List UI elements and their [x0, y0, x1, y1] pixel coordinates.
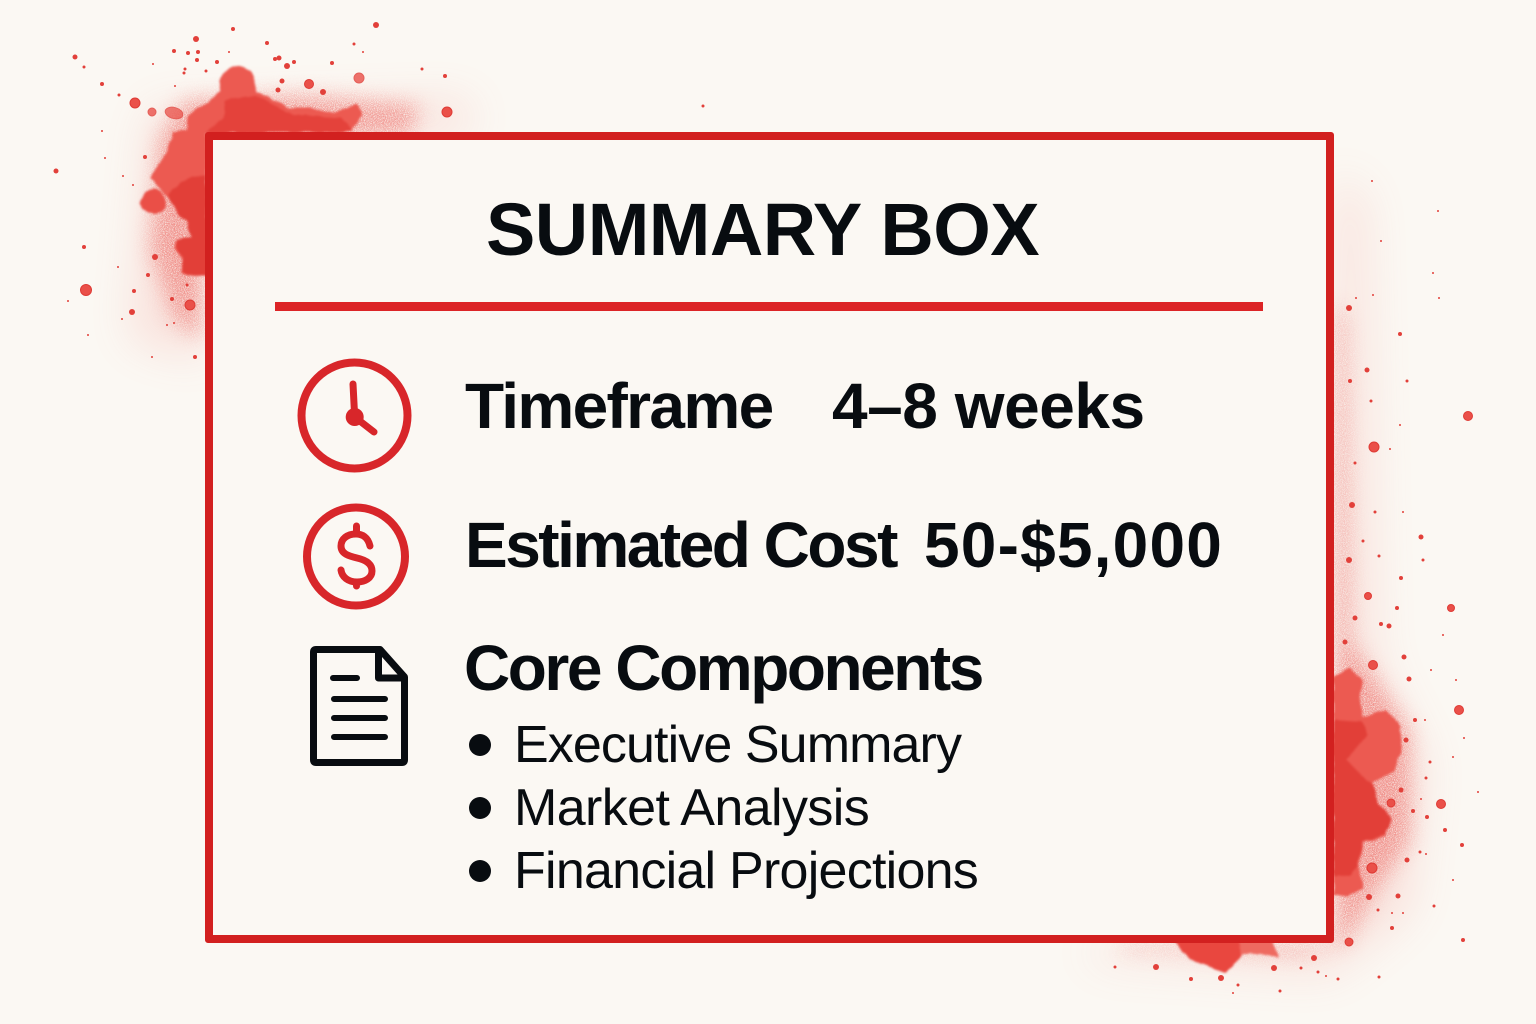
core components heading: Core Components	[464, 632, 982, 704]
summary box panel	[205, 132, 1334, 943]
paint blob: bottom	[1175, 940, 1278, 973]
title: SUMMARY BOX	[486, 188, 1039, 271]
icon: dollar	[303, 504, 409, 610]
soft pink halo around the frame	[130, 100, 1425, 975]
estimated cost value: 50-$5,000	[924, 509, 1223, 581]
paint blob: bottom right	[1333, 668, 1402, 897]
bullet dot 3	[469, 860, 491, 882]
bullet dot 2	[469, 797, 491, 819]
icon: clock	[298, 358, 412, 472]
bullet item: executive summary: Executive Summary	[514, 716, 961, 774]
bullet dot 1	[469, 734, 491, 756]
title divider	[275, 302, 1263, 311]
paint blob: top left	[140, 65, 363, 277]
estimated cost label: Estimated Cost	[465, 509, 896, 581]
large paint droplets	[80, 73, 1472, 946]
sprayed paint speckle	[150, 95, 1410, 955]
timeframe label: Timeframe	[465, 370, 773, 442]
icon: document	[310, 646, 408, 766]
bullet item: financial projections: Financial Projections	[514, 842, 978, 900]
timeframe value: 4–8 weeks	[832, 370, 1145, 442]
bullet item: market analysis: Market Analysis	[514, 779, 869, 837]
components list	[469, 716, 978, 900]
